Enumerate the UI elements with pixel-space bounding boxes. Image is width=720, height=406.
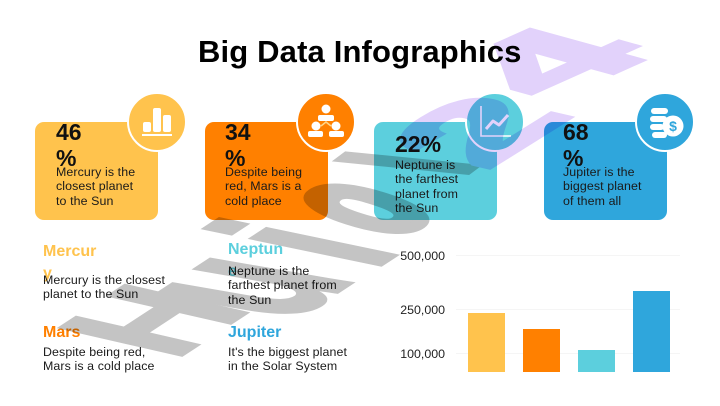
text: Jupiter card text (563, 165, 642, 208)
watermark: 2 (350, 83, 606, 178)
heading: Jupiter: Jupiter (228, 324, 281, 341)
watermark: l (299, 145, 524, 182)
stat: 68%: % (563, 145, 583, 171)
text: Neptune description: the Sun (228, 293, 271, 307)
title: Big Data Infographics (198, 34, 522, 69)
stat: 68%: 68 (563, 119, 589, 145)
panel: Mars card (205, 122, 328, 220)
text: Jupiter description (228, 345, 347, 373)
label: 250,000: 250,000 (400, 303, 445, 317)
text: Neptune card text: the farthest (395, 172, 458, 186)
heading: Neptune (228, 241, 283, 280)
stat: 68% (563, 119, 589, 171)
stat: 34% (225, 119, 251, 171)
stat: 46% (56, 119, 82, 171)
panel: Jupiter card (544, 122, 667, 220)
icon: network people (296, 92, 356, 152)
watermark: u (56, 237, 413, 332)
panel: Mercury card (35, 122, 158, 220)
text: Neptune description: farthest planet from (228, 278, 337, 292)
text: Mars card text (225, 165, 302, 208)
label: 100,000: 100,000 (400, 347, 445, 361)
text: Jupiter card text: Jupiter is the (563, 165, 635, 179)
text: Neptune description (228, 264, 337, 307)
heading: Mercury (43, 243, 96, 282)
text: Mars description (43, 345, 154, 373)
text: Neptune card text (395, 158, 458, 215)
watermark: 4 (407, 13, 692, 109)
text: Jupiter card text: biggest planet (563, 179, 642, 193)
text: Mercury description (43, 273, 165, 301)
stat: 46%: % (56, 145, 76, 171)
text: Jupiter card text: of them all (563, 194, 621, 208)
stat: 34%: % (225, 145, 245, 171)
text: Mercury card text: closest planet (56, 179, 133, 193)
heading: Mars: Mars (43, 324, 80, 341)
text: Mercury card text: to the Sun (56, 194, 114, 208)
stat: 22%: 22% (395, 131, 441, 157)
icon: coins: $ (669, 118, 677, 134)
text: Neptune description: Neptune is the (228, 264, 309, 278)
label: 500,000: 500,000 (400, 249, 445, 263)
heading: Mercury: Mercur (43, 243, 96, 260)
text: Jupiter description: It's the biggest planet (228, 345, 347, 359)
heading: Neptune: Neptun (228, 241, 283, 258)
text: Jupiter description: in the Solar System (228, 359, 337, 373)
watermark: i (155, 205, 454, 281)
text: Neptune card text: the Sun (395, 201, 438, 215)
heading: Mercury: y (43, 265, 52, 282)
panel: Neptune card (374, 122, 497, 220)
icon: bar chart (127, 92, 187, 152)
text: Mars description: Mars is a cold place (43, 359, 154, 373)
stat: 34%: 34 (225, 119, 251, 145)
text: Mars description: Despite being red, (43, 345, 145, 359)
icon: coins (635, 92, 695, 152)
text: Mars card text: red, Mars is a (225, 179, 301, 193)
watermark: o (227, 155, 476, 253)
text: Neptune card text: Neptune is (395, 158, 455, 172)
heading: Neptune: e (228, 263, 237, 280)
text: Mercury card text: Mercury is the (56, 165, 135, 179)
stat: 46%: 46 (56, 119, 82, 145)
text: Mercury description: planet to the Sun (43, 287, 138, 301)
bar chart (468, 291, 670, 372)
text: Mars card text: Despite being (225, 165, 302, 179)
text: Neptune card text: planet from (395, 187, 458, 201)
text: Mercury card text (56, 165, 135, 208)
watermark: H (17, 272, 291, 369)
text: Mars card text: cold place (225, 194, 282, 208)
text: Mercury description: Mercury is the closest (43, 273, 165, 287)
icon: line graph (465, 92, 525, 152)
